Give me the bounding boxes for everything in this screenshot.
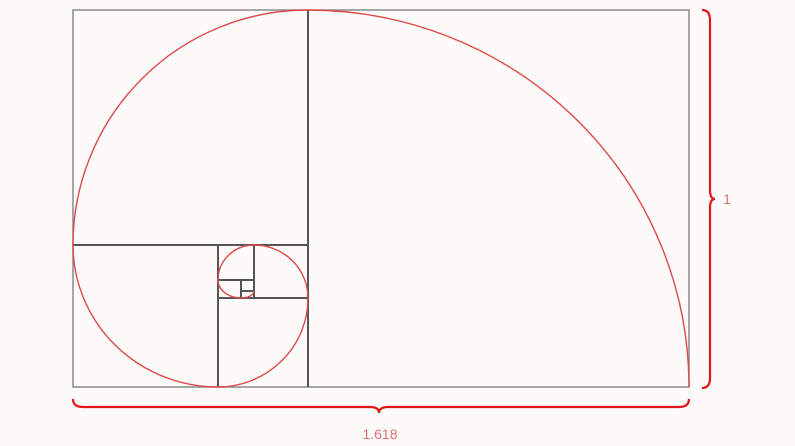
brace: width <box>73 399 689 413</box>
brace: height <box>702 10 715 388</box>
label: 1.618: 1.618 <box>362 426 398 442</box>
label: 1: 1 <box>723 191 731 207</box>
golden rectangle subdivisions <box>73 10 689 387</box>
golden spiral <box>73 10 689 387</box>
